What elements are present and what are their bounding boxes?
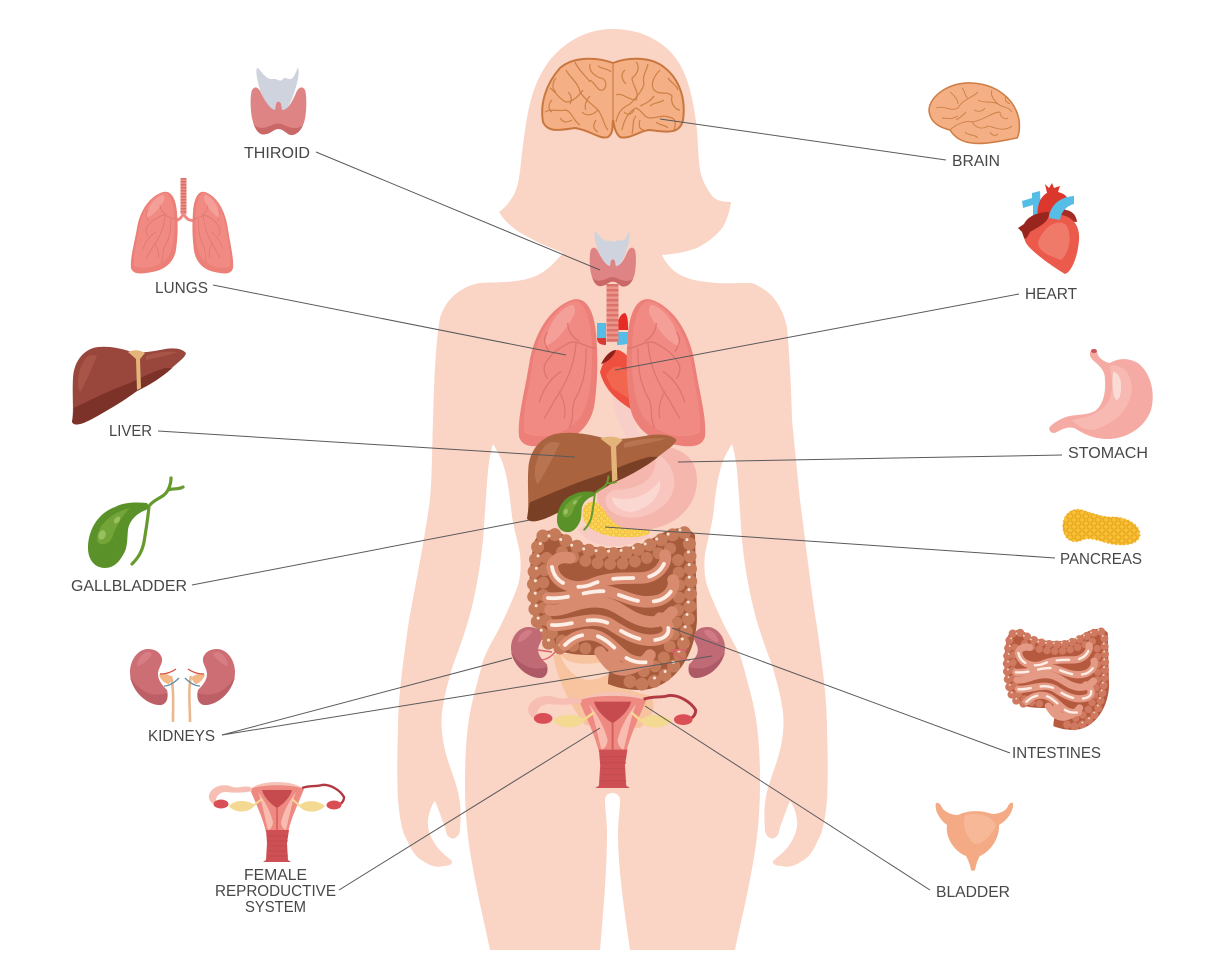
left kidney <box>511 627 548 678</box>
line: pancreas <box>605 527 1055 558</box>
icon: stomach <box>1049 349 1153 439</box>
human body figure <box>397 29 828 950</box>
right renal vessels <box>670 650 690 660</box>
liver in body <box>527 433 676 521</box>
icon: thyroid <box>251 67 306 135</box>
label: bladder: BLADDER <box>936 884 1010 901</box>
label: female reproductive system <box>215 867 336 916</box>
lungs in body <box>519 299 705 446</box>
label: stomach: STOMACH <box>1068 445 1148 462</box>
right lung <box>627 299 705 446</box>
leader lines <box>158 119 1062 890</box>
label: intestines: INTESTINES <box>1012 745 1101 762</box>
gallbladder in body <box>557 476 616 532</box>
label line 1: FEMALE <box>244 867 307 884</box>
intestines in body <box>530 528 697 690</box>
ventricles <box>1024 213 1079 274</box>
stomach in body <box>578 395 697 546</box>
bladder in body <box>553 652 654 728</box>
label: gallbladder: GALLBLADDER <box>71 578 187 595</box>
line: left kidney <box>222 658 512 735</box>
icon: heart <box>1018 183 1079 274</box>
heart highlight <box>1038 222 1070 260</box>
icon: intestines <box>1004 629 1109 730</box>
icon ureters <box>171 676 191 722</box>
thyroid in body <box>590 231 636 287</box>
icon right lung <box>192 192 233 273</box>
label: liver: LIVER <box>109 423 152 440</box>
label: kidneys: KIDNEYS <box>148 728 215 745</box>
icon bronchi <box>172 214 196 221</box>
icon: pancreas <box>1063 509 1140 545</box>
label: thyroid: THIROID <box>244 145 310 162</box>
trachea in body <box>606 284 618 342</box>
right dark atrium <box>1058 209 1077 222</box>
icon right kidney <box>197 649 235 705</box>
line: heart <box>615 294 1019 370</box>
heart in body <box>597 313 632 410</box>
icon: liver <box>72 347 186 424</box>
line: gallbladder <box>192 520 530 585</box>
label: brain: BRAIN <box>952 153 1000 170</box>
line: thyroid <box>316 152 600 270</box>
icon: kidneys <box>130 649 235 722</box>
icon: brain <box>929 83 1019 143</box>
icon left lung <box>131 192 178 273</box>
reproductive system in body <box>528 692 696 788</box>
brain in body <box>542 59 684 138</box>
line: reproductive system <box>339 728 600 890</box>
icon: gallbladder <box>88 478 183 568</box>
aorta <box>1038 183 1068 222</box>
icon renal veins <box>164 678 200 686</box>
label: lungs: LUNGS <box>155 280 208 297</box>
label: heart: HEART <box>1025 286 1077 303</box>
left blue vein <box>1022 191 1041 216</box>
left dark atrium <box>1018 212 1049 239</box>
right kidney <box>688 627 725 678</box>
line: right kidney <box>222 656 712 735</box>
icon: lungs <box>131 178 233 273</box>
left renal vessels <box>538 650 556 660</box>
icon renal arteries <box>160 669 204 674</box>
body silhouette <box>397 29 828 950</box>
line: stomach <box>678 455 1062 462</box>
label line 2: REPRODUCTIVE <box>215 883 336 900</box>
kidneys in body <box>511 627 725 678</box>
icon renal pelvis <box>159 674 205 684</box>
icon: female reproductive system <box>209 782 344 862</box>
line: bladder <box>645 706 930 890</box>
line: lungs <box>213 285 566 355</box>
icon: bladder <box>936 803 1013 871</box>
label line 3: SYSTEM <box>245 899 306 916</box>
icon left kidney <box>130 649 168 705</box>
label: pancreas: PANCREAS <box>1060 551 1142 568</box>
line: intestines <box>672 628 1010 753</box>
line: liver <box>158 431 575 457</box>
icon trachea <box>180 178 186 214</box>
line: brain <box>660 119 946 160</box>
pancreas in body <box>583 502 650 537</box>
right blue artery <box>1049 196 1074 220</box>
left lung <box>519 299 597 446</box>
